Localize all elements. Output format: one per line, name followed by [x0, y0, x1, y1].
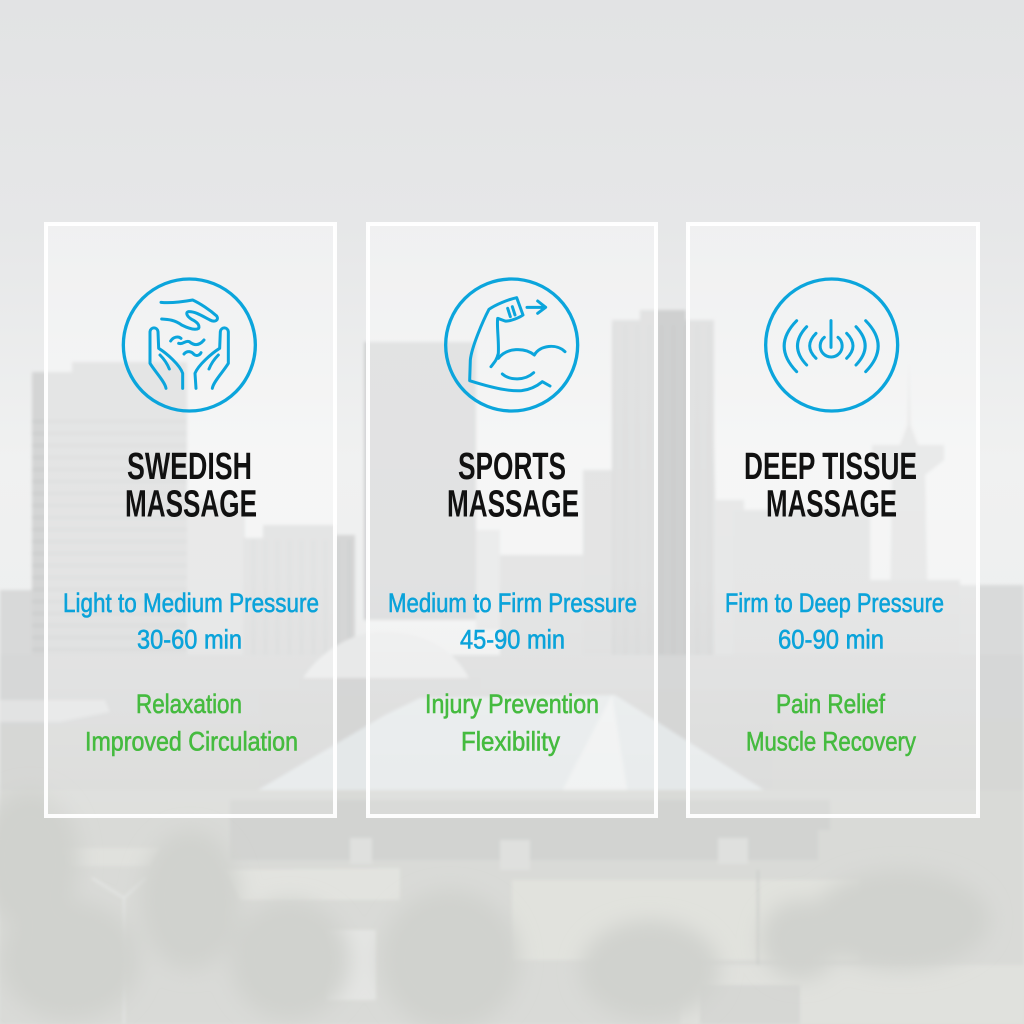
text: pressure and duration — [388, 588, 637, 654]
heading: Deep tissue massage: MASSAGE — [766, 484, 897, 526]
text: benefits — [746, 689, 916, 756]
text: pressure and duration: Firm to Deep Pressure — [725, 588, 944, 618]
heading: Swedish massage: MASSAGE — [125, 484, 257, 526]
heading: Sports massage — [447, 446, 579, 526]
icon: hands over water — [123, 279, 255, 411]
icon: flexed arm — [446, 279, 578, 411]
text: benefits: Relaxation — [136, 689, 242, 719]
text: pressure and duration: 30-60 min — [137, 624, 242, 654]
heading: Swedish massage: SWEDISH — [127, 446, 252, 488]
heading: Deep tissue massage: DEEP TISSUE — [744, 446, 917, 488]
text: benefits: Muscle Recovery — [746, 726, 916, 756]
text: pressure and duration: 45-90 min — [460, 624, 565, 654]
text: benefits: Injury Prevention — [425, 689, 599, 719]
text: pressure and duration: Light to Medium Pressure — [63, 588, 319, 618]
panel: Swedish massage — [46, 224, 335, 816]
text: benefits: Improved Circulation — [85, 726, 298, 756]
icon: power symbol with vibration waves — [766, 279, 898, 411]
heading: Swedish massage — [125, 446, 257, 526]
heading: Sports massage: MASSAGE — [447, 484, 579, 526]
text: pressure and duration: 60-90 min — [778, 624, 884, 654]
panel: Deep tissue massage — [688, 224, 978, 816]
text: pressure and duration: Medium to Firm Pressure — [388, 588, 637, 618]
heading: Sports massage: SPORTS — [458, 446, 566, 488]
text: pressure and duration — [725, 588, 944, 654]
panel: Sports massage — [368, 224, 656, 816]
heading: Deep tissue massage — [744, 446, 917, 526]
text: benefits: Pain Relief — [776, 689, 885, 719]
text: benefits — [425, 689, 599, 756]
text: benefits: Flexibility — [461, 726, 560, 756]
text: pressure and duration — [63, 588, 319, 654]
text: benefits — [85, 689, 298, 756]
